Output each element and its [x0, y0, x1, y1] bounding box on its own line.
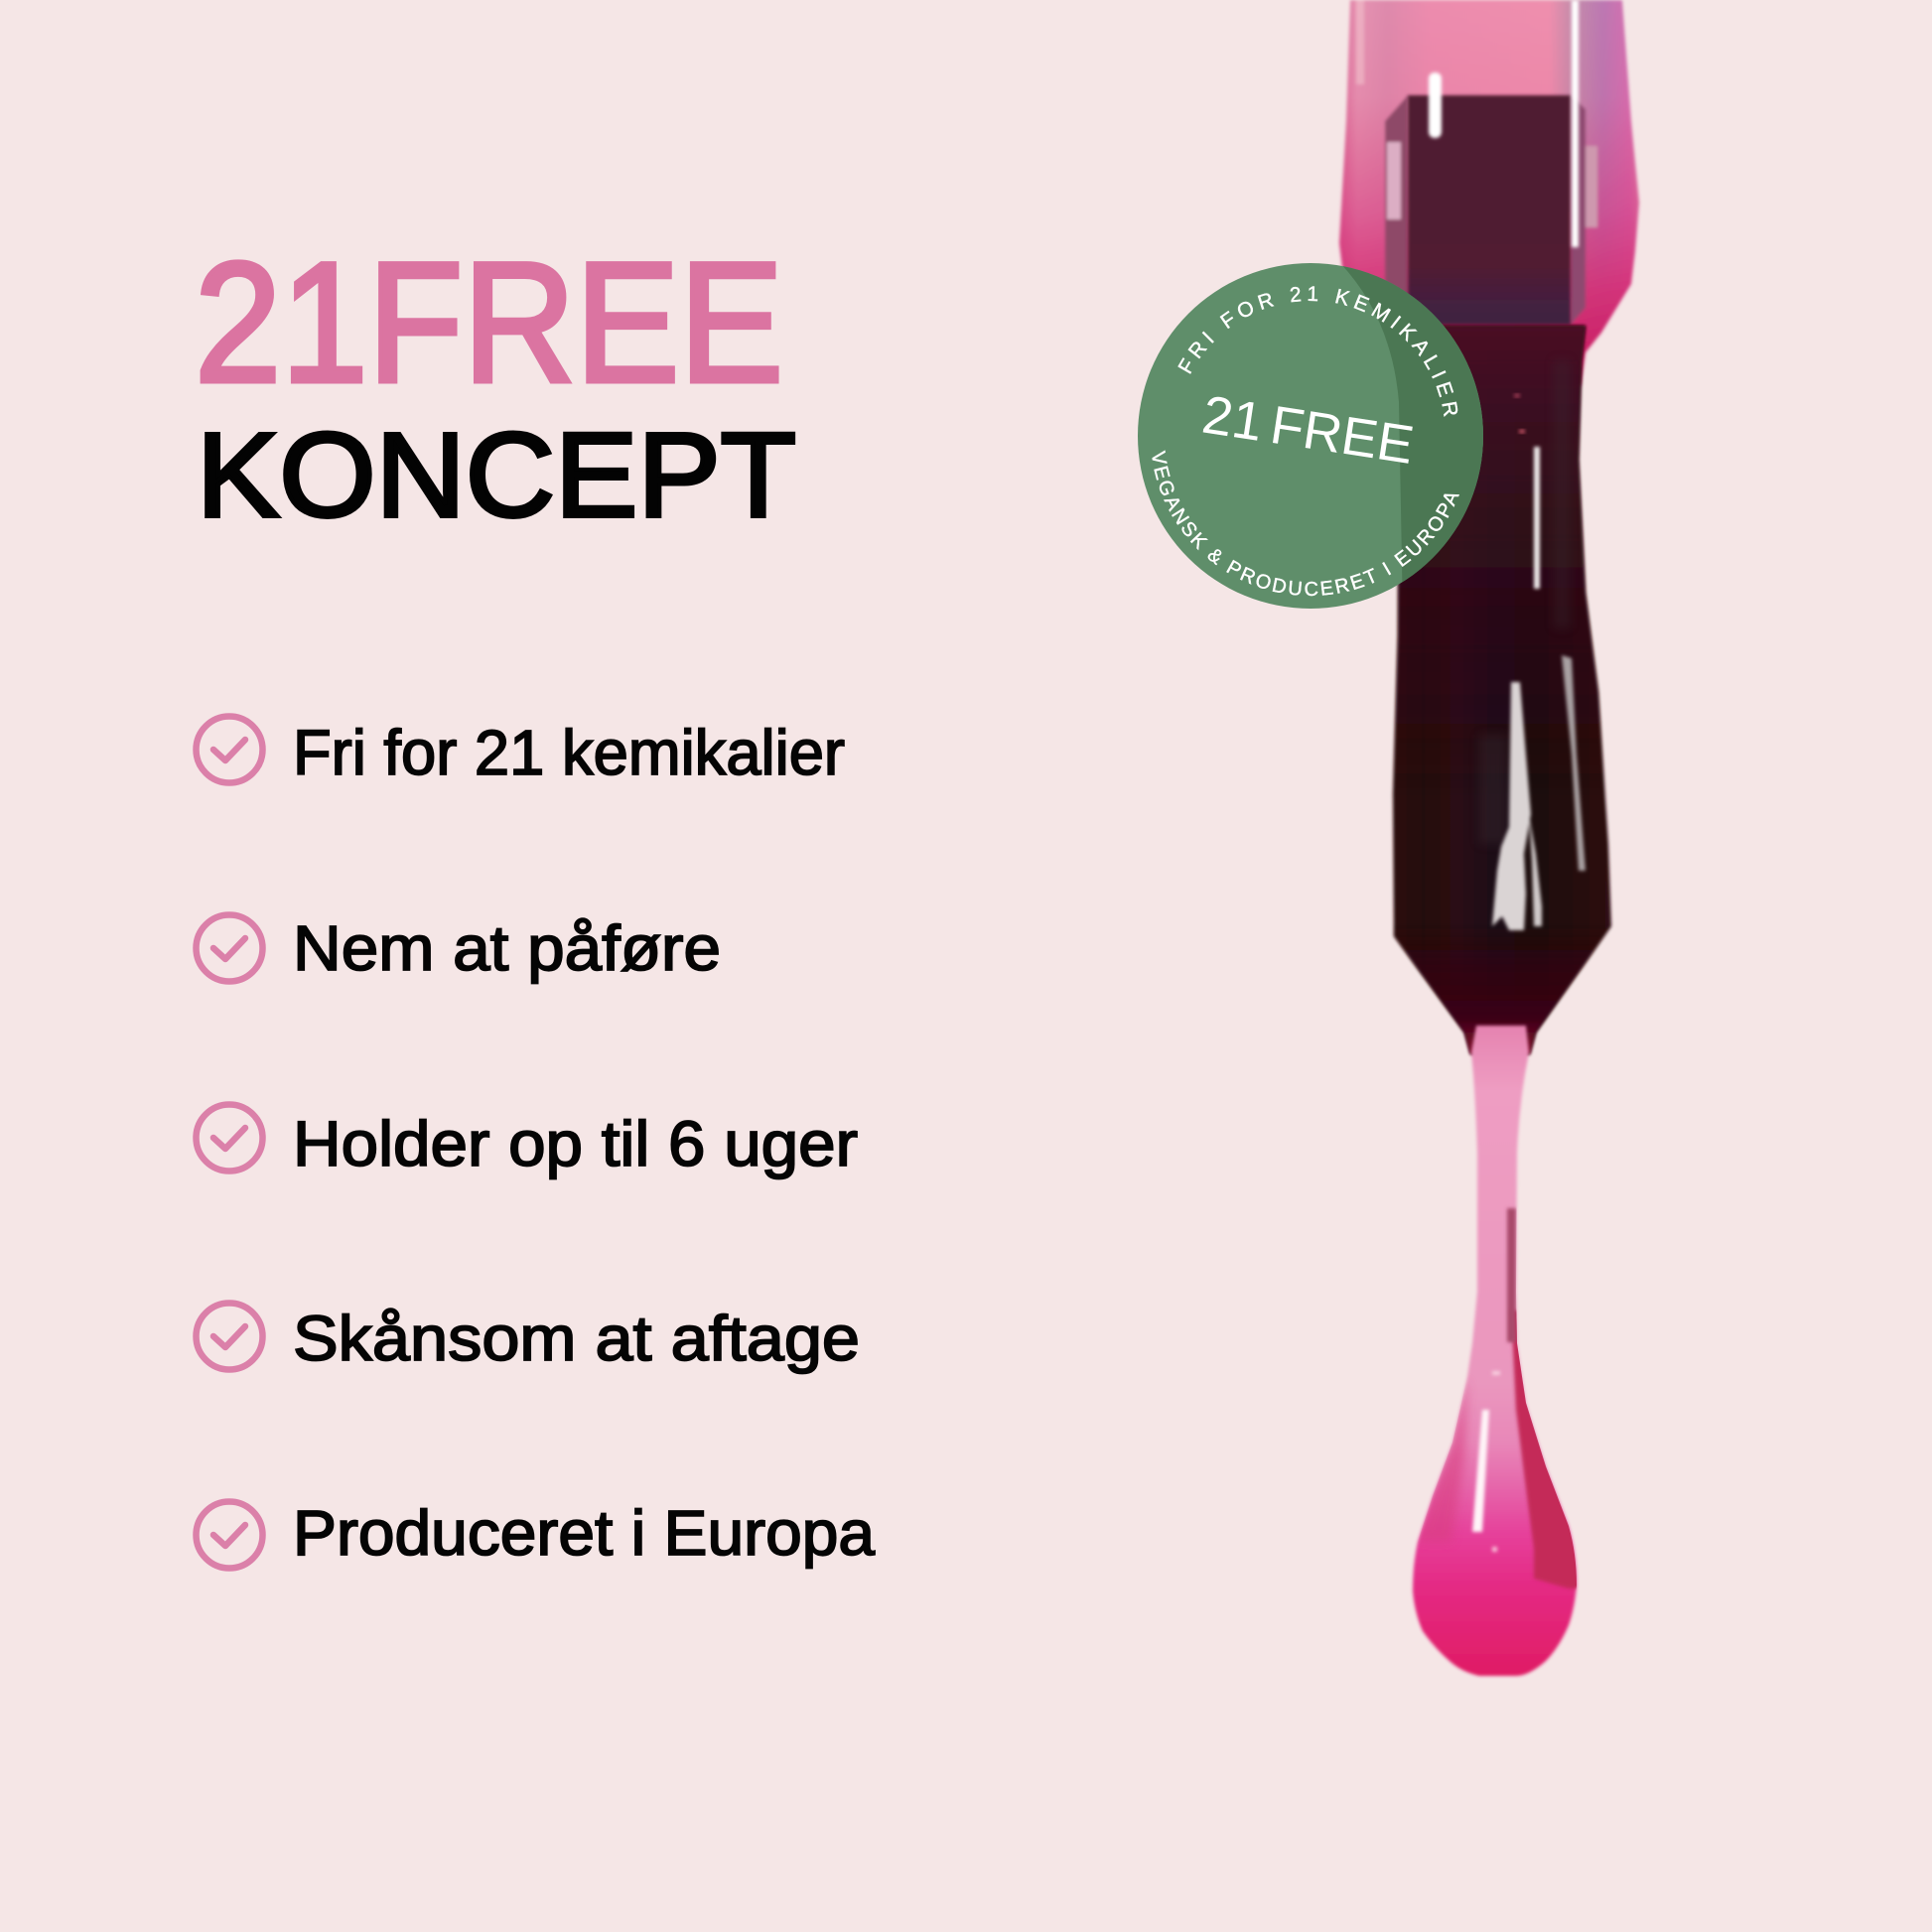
- brush bristles: translucent pink top: [1339, 0, 1639, 385]
- icon: check circle: [197, 1501, 262, 1569]
- body details: [1479, 360, 1570, 844]
- title: [195, 227, 796, 542]
- highlights: [1429, 0, 1586, 1552]
- icon: check circle: [197, 1303, 262, 1370]
- item: Nem at påføre: [197, 912, 721, 984]
- badge disc: [1138, 263, 1483, 609]
- title line: 21FREE: 21FREE: [195, 227, 783, 418]
- thread and drop: [1413, 1026, 1577, 1676]
- label: Fri for 21 kemikalier: [293, 717, 845, 788]
- feature list: [197, 717, 875, 1569]
- icon: check circle: [197, 717, 262, 782]
- item: Holder op til 6 uger: [197, 1104, 858, 1179]
- badge: 21 FREE: [1138, 263, 1483, 609]
- curved text: top: FRI FOR 21 KEMIKALIER: [1177, 286, 1457, 417]
- badge centre text: 21 FREE: [1198, 385, 1418, 476]
- curved text: bottom: VEGANSK & PRODUCERET I EUROPA: [1152, 450, 1459, 596]
- item: Fri for 21 kemikalier: [197, 717, 845, 788]
- item: Skånsom at aftage: [197, 1303, 860, 1374]
- icon: check circle: [197, 1104, 262, 1172]
- item: Produceret i Europa: [197, 1497, 875, 1569]
- dark square inside brush: [1408, 95, 1571, 325]
- label: Skånsom at aftage: [293, 1303, 860, 1374]
- body shading: [1393, 326, 1611, 1054]
- label: Holder op til 6 uger: [293, 1108, 858, 1179]
- label: Produceret i Europa: [293, 1497, 875, 1569]
- nail polish brush with drip: [1339, 0, 1639, 1676]
- title line: KONCEPT: KONCEPT: [197, 407, 796, 542]
- icon: check circle: [197, 915, 262, 981]
- dark polish body: [1393, 326, 1611, 1054]
- darker area where polish shows through: [1342, 266, 1483, 582]
- label: Nem at påføre: [293, 912, 721, 984]
- drop shading: [1418, 1208, 1588, 1588]
